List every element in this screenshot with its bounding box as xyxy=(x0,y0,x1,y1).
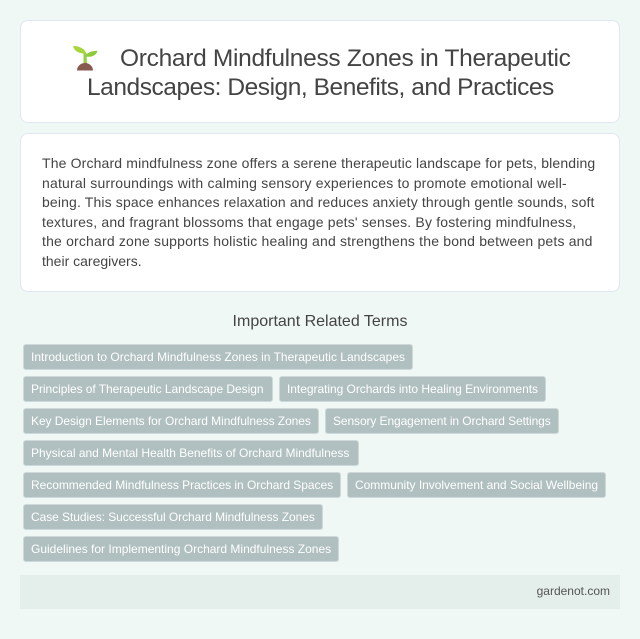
tag xyxy=(23,344,413,370)
tag xyxy=(347,472,606,498)
description text: being. This space enhances relaxation and reduces anxiety through gentle sounds, soft xyxy=(42,194,595,210)
tag xyxy=(279,376,546,402)
tag: Sensory Engagement in Orchard Settings xyxy=(333,414,551,428)
tag xyxy=(23,504,323,530)
footer bar xyxy=(20,575,620,609)
description text: natural surroundings with calming sensory experiences to promote emotional well- xyxy=(42,175,567,191)
related terms tags xyxy=(23,344,606,562)
title: Landscapes: Design, Benefits, and Practices xyxy=(87,74,554,101)
title: Orchard Mindfulness Zones in Therapeutic xyxy=(120,45,571,72)
tag: Physical and Mental Health Benefits of Orchard Mindfulness xyxy=(31,446,349,460)
description text xyxy=(42,155,595,269)
title xyxy=(87,45,571,101)
tag xyxy=(325,408,559,434)
footer source: gardenot.com xyxy=(537,584,610,598)
tag: Principles of Therapeutic Landscape Design xyxy=(31,382,264,396)
tag: Guidelines for Implementing Orchard Mindfulness Zones xyxy=(31,542,331,556)
description text: the orchard zone supports holistic healing and strengthens the bond between pets and xyxy=(42,233,593,249)
tag xyxy=(23,376,273,402)
tag: Introduction to Orchard Mindfulness Zones in Therapeutic Landscapes xyxy=(31,350,405,364)
icon: sprout xyxy=(73,46,98,70)
tag: Case Studies: Successful Orchard Mindfulness Zones xyxy=(31,510,315,524)
description panel xyxy=(20,133,620,292)
tag: Key Design Elements for Orchard Mindfulness Zones xyxy=(31,414,311,428)
tag xyxy=(23,536,339,562)
tag: Integrating Orchards into Healing Environments xyxy=(287,382,538,396)
tag xyxy=(23,440,359,466)
tag xyxy=(23,408,319,434)
tag: Recommended Mindfulness Practices in Orchard Spaces xyxy=(31,478,333,492)
description text: The Orchard mindfulness zone offers a serene therapeutic landscape for pets, blending xyxy=(42,155,595,171)
description text: their caregivers. xyxy=(42,253,142,269)
title panel xyxy=(20,20,620,123)
tag xyxy=(23,472,341,498)
related terms heading: Important Related Terms xyxy=(233,313,407,330)
tag: Community Involvement and Social Wellbeing xyxy=(355,478,598,492)
description text: textures, and fragrant blossoms that engage pets' senses. By fostering mindfulness, xyxy=(42,214,576,230)
